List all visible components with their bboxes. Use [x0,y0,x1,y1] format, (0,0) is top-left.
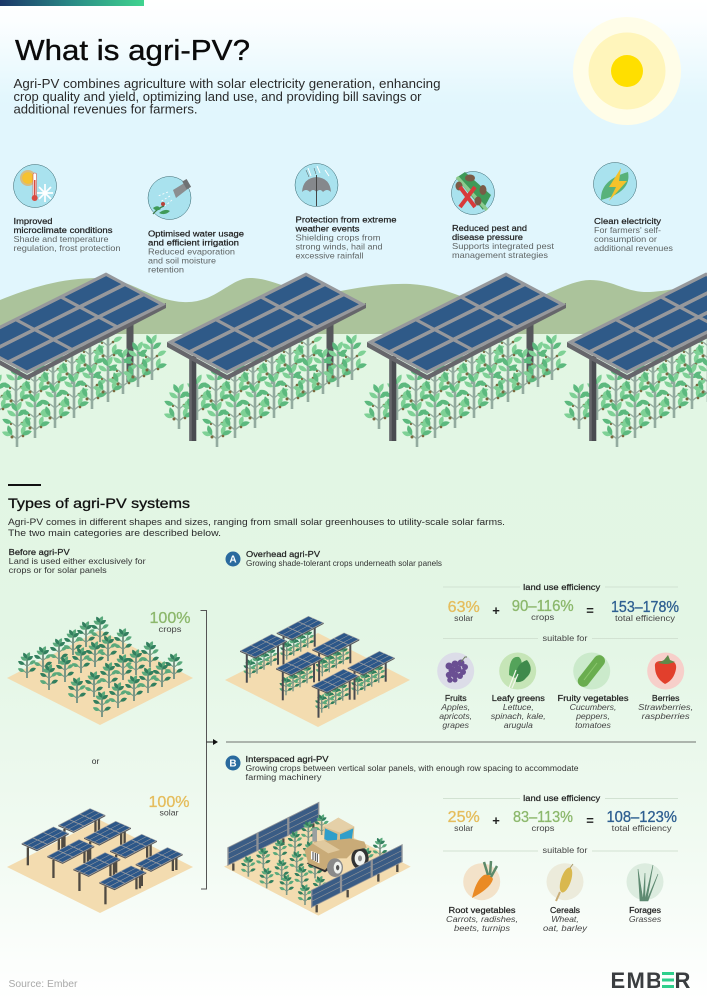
before agri-PV text: crops or for solar panels [9,565,107,575]
crop: cereals: Wheat, [551,914,579,924]
icon: umbrella under rain [295,164,338,206]
suitable for B: suitable for [542,845,588,855]
solar array with crops 4 [563,272,707,447]
section intro: Agri-PV comes in different shapes and sizes, ranging from small solar greenhouses to utility-scale solar farms. [8,517,505,528]
icon: grass [626,863,664,901]
benefit: weather [294,164,397,260]
solar share: 63% [448,599,480,616]
total efficiency: 153–178% [611,599,679,616]
land use efficiency A: land use efficiency [523,582,601,592]
solar array with crops 3 [363,272,568,447]
before agri-PV text [9,547,146,575]
crop: fruits: apricots, [439,711,472,721]
source: Source: Ember [8,979,78,990]
icon: strawberry [647,652,684,690]
title: What is agri-PV? [15,35,250,67]
hills [0,278,707,334]
icon: sun [573,17,681,125]
stat: 100% crops [150,610,191,634]
benefit: clean electricity: additional revenues [594,243,673,253]
overhead heading: Overhead agri-PV [246,549,320,559]
benefit: water [148,176,244,274]
crop: fruits: grapes [442,720,470,730]
benefit: weather: Shielding crops from [296,232,380,242]
benefit: weather: weather events [294,224,360,234]
icon: sun, thermometer, snowflake [14,164,56,208]
icon: grapes [437,652,474,690]
crop: fruity vegetables: Fruity vegetables [558,693,629,703]
land use efficiency B: land use efficiency [523,793,601,803]
crop: forages: Grasses [629,914,662,924]
crop: berries: Berries [652,693,680,703]
interspaced heading: Interspaced agri-PV [246,754,329,764]
crop: forages: Forages [629,905,662,915]
land use efficiency B: + [492,813,500,828]
crop: berries [638,652,693,721]
icon: carrot [463,861,500,900]
crop: fruity vegetables: peppers, [575,711,610,721]
benefit: pests: Reduced pest and [452,223,527,233]
intro text: additional revenues for farmers. [14,102,198,116]
intro text [14,77,441,116]
solar array with crops 1 [0,272,168,447]
benefit: microclimate: regulation, frost protection [14,243,121,253]
land use efficiency A: + [492,603,500,618]
stat: 100% crops: crops [158,624,182,634]
section intro: The two main categories are described below. [8,528,221,539]
crop: leafy greens [491,652,546,730]
interspaced heading: farming machinery [246,772,322,782]
benefit: pests: management strategies [452,250,548,260]
rear vertical panel row [227,802,319,871]
suitable for A: suitable for [542,633,588,643]
crop: root vegetables: beets, turnips [454,923,511,933]
stat: 100% crops: 100% [150,610,191,627]
bracket and arrow [200,610,696,889]
land use efficiency A: = [586,603,594,618]
crop: fruits [437,652,474,730]
diagram: interspaced agri-PV with tractor [224,802,411,916]
benefit: pests [452,172,555,260]
total efficiency [606,809,677,833]
crop: forages [626,863,664,924]
benefit: pests: Supports integrated pest [452,241,555,251]
crop: cereals: oat, barley [543,923,588,933]
crops share: crops [532,823,554,833]
interspaced heading: Growing crops between vertical solar panels, with enough row spacing to accommodate [246,763,579,773]
solar share: solar [454,613,473,623]
logo: Ember: EMBER [610,968,690,993]
solar share: 25% [448,809,480,826]
before agri-PV text: Before agri-PV [9,547,70,557]
crops share [512,598,574,622]
solar share [448,599,480,623]
stat: 100% solar [148,794,190,818]
interspaced heading: B [229,758,237,770]
benefit: weather: excessive rainfall [296,250,364,260]
top gradient bar [0,0,144,6]
icon: leafy greens [499,652,536,690]
benefit: microclimate: Improved [14,216,53,226]
crops share [513,809,573,833]
solar array with crops 2 [163,272,368,447]
benefit: water: Reduced evaporation [148,246,235,256]
total efficiency [611,599,679,623]
crop: fruity vegetables [558,652,629,730]
land use efficiency B: = [586,813,594,828]
diagram: overhead agri-PV [225,616,410,727]
diagram: solar only [7,808,193,913]
section heading: types: Types of agri-PV systems [8,495,190,511]
crop: berries: raspberries [642,711,690,721]
benefit: clean electricity [594,162,673,253]
crops share: 90–116% [512,598,574,615]
crop: fruity vegetables: Cucumbers, [570,702,616,712]
benefit: clean electricity: Clean electricity [594,216,662,226]
total efficiency: total efficiency [612,823,673,833]
benefit: weather: Protection from extreme [296,214,397,224]
benefit: microclimate [14,164,121,253]
diagram: crops only [7,616,193,725]
or: or [92,756,99,766]
total efficiency: total efficiency [615,613,676,623]
overhead heading [226,549,443,568]
icon: crossed-out pests on stem [452,172,494,214]
stat: 100% solar: solar [160,808,179,818]
crop: fruits: Fruits [445,693,467,703]
intro text: crop quality and yield, optimizing land use, and providing bill savings or [14,90,422,104]
crop: root vegetables [446,861,518,933]
crop: root vegetables: Root vegetables [448,905,516,915]
front vertical panel row [311,844,403,912]
crop: cereals [543,863,588,933]
icon: wheat ear [546,863,584,901]
total efficiency: 108–123% [606,809,677,826]
icon: cucumber [573,652,610,690]
crop: leafy greens: arugula [504,720,533,730]
crop: leafy greens: Lettuce, [503,702,534,712]
crop: fruits: Apples, [440,702,470,712]
benefit: water: retention [148,264,184,274]
tractor [304,818,369,877]
benefit: clean electricity: consumption or [594,234,657,244]
benefit: microclimate: microclimate conditions [14,225,113,235]
land use efficiency A [443,582,679,623]
benefit: water: and soil moisture [148,256,216,266]
crops share: crops [531,612,554,622]
crop: cereals: Cereals [550,905,581,915]
stat: 100% solar: 100% [148,794,190,811]
icon: leaf and lightning bolt [594,162,636,206]
crop: berries: Strawberries, [638,702,693,712]
benefit: weather: strong winds, hail and [296,242,383,252]
interspaced heading [226,754,579,782]
crops share: 83–113% [513,809,573,826]
crop rows [241,814,387,905]
crop: leafy greens: Leafy greens [492,693,545,703]
solar share: solar [454,823,473,833]
overhead heading: Growing shade-tolerant crops underneath solar panels [246,558,443,568]
benefit: clean electricity: For farmers' self- [594,225,661,235]
crop: root vegetables: Carrots, radishes, [446,914,518,924]
before agri-PV text: Land is used either exclusively for [9,556,146,566]
benefit: microclimate: Shade and temperature [14,234,109,244]
crop: leafy greens: spinach, kale, [491,711,546,721]
benefit: water: Optimised water usage [148,228,244,238]
benefit: pests: disease pressure [452,232,523,242]
section intro [8,517,505,539]
solar share [448,809,480,833]
crop: fruity vegetables: tomatoes [575,720,612,730]
overhead heading: A [229,554,237,566]
intro text: Agri-PV combines agriculture with solar electricity generation, enhancing [14,77,441,91]
benefit: water: and efficient irrigation [148,238,239,248]
land use efficiency B [443,793,678,833]
icon: watering nozzle on plant [148,176,191,220]
